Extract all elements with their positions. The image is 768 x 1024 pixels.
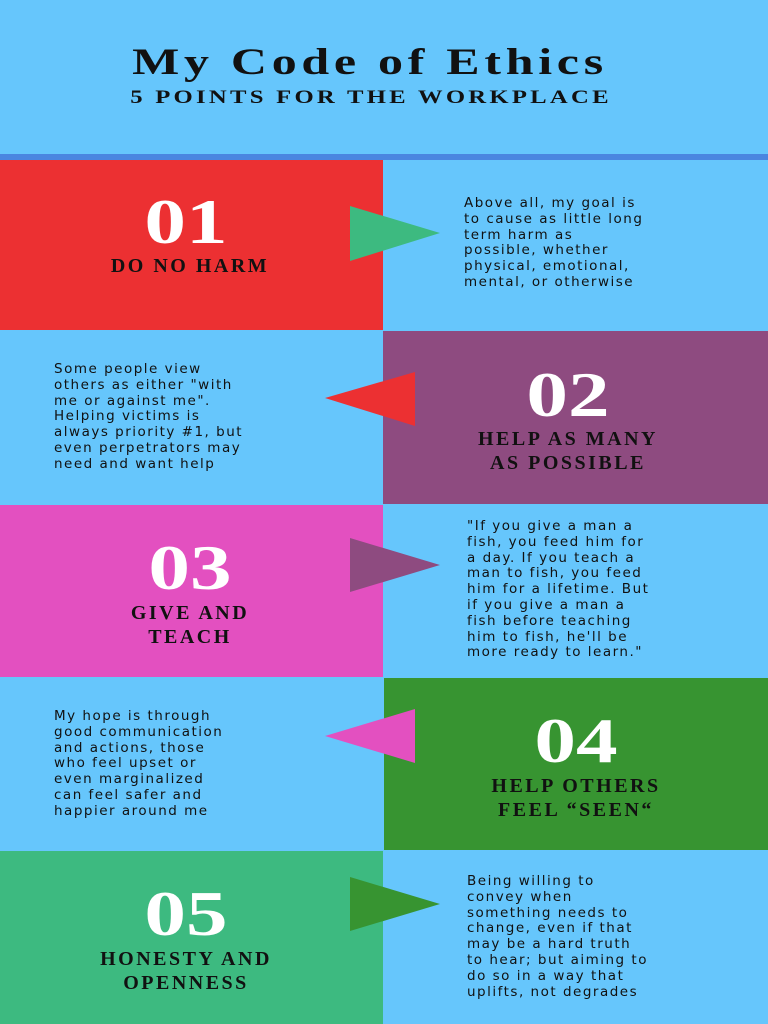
subtitle: 5 POINTS FOR THE WORKPLACE xyxy=(130,87,612,108)
text 3: a day. If you teach a xyxy=(467,550,635,566)
label 4: HELP OTHERS xyxy=(491,775,661,797)
panel 2 xyxy=(383,331,768,504)
label 1: DO NO HARM xyxy=(111,255,269,277)
text 2: me or against me". xyxy=(54,393,211,409)
label 2 xyxy=(478,428,658,474)
text 3: fish before teaching xyxy=(467,613,632,629)
text 2 xyxy=(54,361,243,472)
label 2: AS POSSIBLE xyxy=(490,452,646,474)
text 3: him for a lifetime. But xyxy=(467,581,649,597)
number 01: 01 xyxy=(144,186,228,257)
text 4: My hope is through xyxy=(54,708,211,724)
text 3: if you give a man a xyxy=(467,597,625,613)
text 4: who feel upset or xyxy=(54,755,197,771)
text 1: physical, emotional, xyxy=(464,258,630,274)
title: My Code of Ethics xyxy=(132,42,608,83)
text 1: Above all, my goal is xyxy=(464,195,636,211)
arrow 2 xyxy=(325,372,415,426)
label 3 xyxy=(131,602,249,648)
number 02: 02 xyxy=(526,359,610,430)
label 5: HONESTY AND xyxy=(100,948,272,970)
label 4 xyxy=(491,775,661,821)
text 2: always priority #1, but xyxy=(54,424,243,440)
text 5: may be a hard truth xyxy=(467,936,631,952)
number 04: 04 xyxy=(534,705,618,776)
text 4: even marginalized xyxy=(54,771,204,787)
number 05: 05 xyxy=(144,878,228,949)
text 4: happier around me xyxy=(54,803,209,819)
text 5: convey when xyxy=(467,889,573,905)
arrow 3 xyxy=(350,538,440,592)
arrow 5 xyxy=(350,877,440,931)
text 5: something needs to xyxy=(467,905,628,921)
text 3: more ready to learn." xyxy=(467,644,643,660)
panel 4 xyxy=(384,678,768,850)
text 2: even perpetrators may xyxy=(54,440,241,456)
text 3: him to fish, he'll be xyxy=(467,629,628,645)
panel 3 xyxy=(0,505,383,677)
label 5 xyxy=(100,948,272,994)
text 2: Some people view xyxy=(54,361,202,377)
text 1: possible, whether xyxy=(464,242,609,258)
arrow 4 xyxy=(325,709,415,763)
text 5 xyxy=(467,873,648,1000)
label 4: FEEL “SEEN“ xyxy=(498,799,654,821)
label 5: OPENNESS xyxy=(123,972,249,994)
label 2: HELP AS MANY xyxy=(478,428,658,450)
text 4 xyxy=(54,708,223,819)
number 03: 03 xyxy=(148,532,232,603)
text 5: change, even if that xyxy=(467,920,633,936)
text 1: to cause as little long xyxy=(464,211,643,227)
arrow 1 xyxy=(350,206,440,261)
label 3: TEACH xyxy=(148,626,232,648)
text 2: need and want help xyxy=(54,456,215,472)
text 5: to hear; but aiming to xyxy=(467,952,648,968)
text 5: do so in a way that xyxy=(467,968,624,984)
panel 5 xyxy=(0,851,383,1024)
text 2: others as either "with xyxy=(54,377,233,393)
text 1: term harm as xyxy=(464,227,573,243)
text 4: and actions, those xyxy=(54,740,205,756)
text 2: Helping victims is xyxy=(54,408,200,424)
text 3 xyxy=(467,518,649,660)
text 4: good communication xyxy=(54,724,223,740)
text 5: uplifts, not degrades xyxy=(467,984,638,1000)
text 5: Being willing to xyxy=(467,873,595,889)
panel 1 xyxy=(0,160,383,330)
text 3: fish, you feed him for xyxy=(467,534,644,550)
text 1: mental, or otherwise xyxy=(464,274,634,290)
text 3: man to fish, you feed xyxy=(467,565,642,581)
text 3: "If you give a man a xyxy=(467,518,633,534)
text 1 xyxy=(464,195,643,290)
label 3: GIVE AND xyxy=(131,602,249,624)
text 4: can feel safer and xyxy=(54,787,203,803)
